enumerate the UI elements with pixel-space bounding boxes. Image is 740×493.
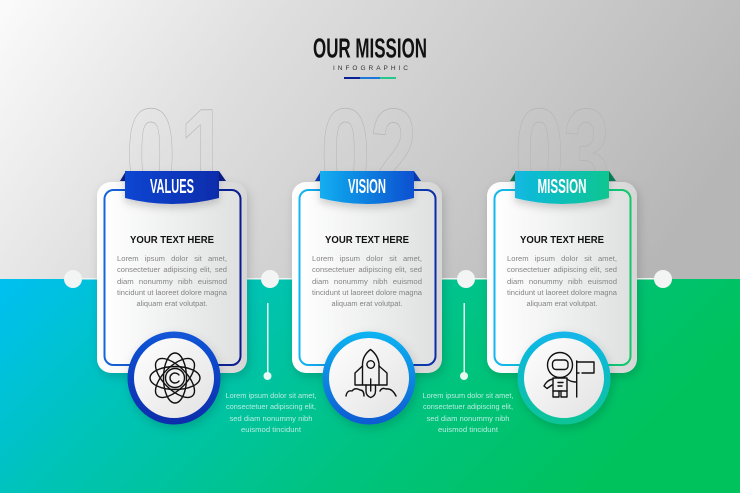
ribbon folds (120, 171, 226, 181)
ribbon folds (510, 171, 616, 181)
card inner border (104, 190, 240, 365)
heading: YOUR TEXT HERE (520, 235, 604, 246)
outline number 01: 0 (126, 83, 176, 226)
icon badge: atom (128, 332, 220, 424)
side text 1: sed diam nonummy nibh (230, 414, 312, 423)
outline number 02: 2 (370, 82, 417, 225)
side text 1 (226, 391, 316, 434)
body text (507, 254, 618, 308)
body text: Lorem ipsum dolor sit amet, (312, 254, 422, 263)
ribbon label: VISION (348, 176, 386, 198)
background: cyan to green lower half (0, 279, 740, 493)
panel: vision (292, 171, 442, 424)
body text: tincidunt ut laoreet dolore magna (507, 288, 618, 297)
body text: diam nonummy nibh euismod (507, 277, 617, 286)
ribbon (515, 171, 609, 204)
connector stem 1 (264, 303, 272, 380)
outline number 01: 1 (180, 83, 228, 226)
outline number 02 (324, 108, 413, 171)
ribbon folds (315, 171, 421, 181)
side text 2: sed diam nonummy nibh (426, 414, 510, 423)
body text (312, 254, 423, 308)
body text: aliquam erat volutpat. (526, 299, 598, 308)
side text 1: consectetuer adipiscing elit, (226, 402, 316, 411)
body text: aliquam erat volutpat. (332, 299, 402, 308)
heading: YOUR TEXT HERE (325, 235, 409, 246)
panel: values (97, 171, 247, 424)
side text 2: Lorem ipsum dolor sit amet, (422, 391, 514, 400)
body text: consectetuer adipiscing elit, sed (312, 265, 422, 274)
card frame (97, 182, 247, 373)
outline number 02: 0 (320, 83, 370, 226)
card frame (487, 182, 637, 373)
side text 2: euismod tincidunt (438, 425, 499, 434)
body text: diam nonummy nibh euismod (312, 277, 422, 286)
timeline line (73, 278, 663, 280)
outline number 03: 0 (514, 83, 564, 226)
title accent line (344, 77, 396, 79)
card inner border (300, 190, 436, 365)
connector stem 2 (460, 303, 468, 380)
body text: consectetuer adipiscing elit, sed (117, 265, 227, 274)
card frame (292, 182, 442, 373)
body text: consectetuer adipiscing elit, sed (507, 265, 617, 274)
body text (117, 254, 228, 308)
body text: aliquam erat volutpat. (136, 299, 208, 308)
side text 1: Lorem ipsum dolor sit amet, (226, 391, 316, 400)
body text: tincidunt ut laoreet dolore magna (117, 288, 228, 297)
background: grey upper half (0, 0, 740, 279)
panel: mission (487, 171, 637, 424)
title: OUR MISSION (313, 32, 427, 64)
icon badge: rocket (322, 332, 416, 424)
ribbon (125, 171, 219, 204)
heading: YOUR TEXT HERE (130, 235, 214, 246)
body text: Lorem ipsum dolor sit amet, (507, 254, 617, 263)
side text 2: consectetuer adipiscing elit, (423, 402, 513, 411)
body text: Lorem ipsum dolor sit amet, (117, 254, 227, 263)
outline number 01 (129, 108, 212, 171)
ribbon label: VALUES (150, 176, 194, 198)
ribbon label: MISSION (538, 176, 586, 198)
body text: tincidunt ut laoreet dolore magna (312, 288, 423, 297)
outline number 03: 3 (563, 82, 610, 225)
body text: diam nonummy nibh euismod (117, 277, 227, 286)
card inner border (494, 190, 630, 365)
side text 1: euismod tincidunt (241, 425, 302, 434)
side text 2 (422, 391, 514, 434)
timeline dots (64, 270, 672, 288)
outline number 03 (518, 108, 607, 171)
icon badge: astronaut with flag (518, 332, 610, 424)
subtitle: INFOGRAPHIC (333, 65, 408, 72)
ribbon (320, 171, 414, 204)
